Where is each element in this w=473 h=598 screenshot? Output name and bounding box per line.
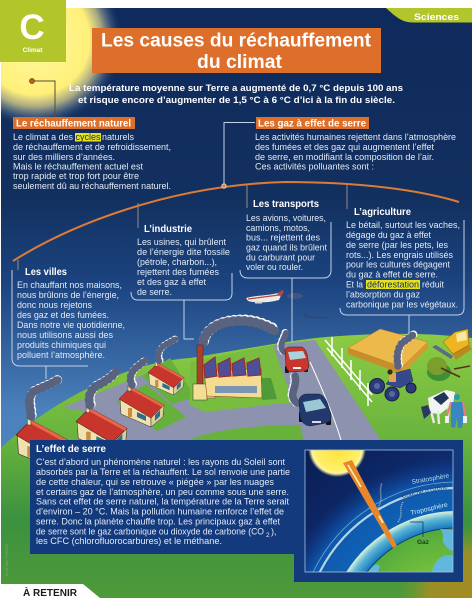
green hill landscape (1, 320, 472, 598)
panel: natural warming: de réchauffement et de refroidissement, (13, 142, 171, 152)
uprooted tree (427, 357, 470, 381)
panel: greenhouse gases: des fumées et des gaz qui augmentent l’effet (255, 142, 434, 152)
panel: agriculture: déforestation (367, 280, 419, 290)
house smoke (29, 338, 177, 416)
panel: cities: Dans notre vie quotidienne, (17, 320, 125, 330)
hay field (348, 329, 428, 374)
panel: industry: L’industrie (144, 224, 192, 235)
panel: cities: polluent l’atmosphère. (17, 350, 105, 360)
red car smoke (280, 332, 286, 352)
rising gas (378, 483, 403, 522)
letter tab: Climat (23, 47, 43, 54)
panel: cities: En chauffant nos maisons, (17, 280, 122, 290)
sun connector (30, 78, 55, 117)
tractor (370, 369, 416, 401)
panel: agriculture: rots...). Les engrais utilisés (346, 250, 453, 260)
factory (193, 320, 276, 400)
panel: greenhouse effect: d’environ – 20 °C. Mais la pollution humaine renforce l’effet de (36, 506, 284, 516)
section tab: Sciences: Sciences (414, 12, 459, 23)
panel: agriculture: L’agriculture (354, 207, 411, 218)
panel: industry: rejettent des fumées (137, 267, 220, 277)
panel: greenhouse effect: serre. Donc la planète chauffe trop. Les principaux gaz à effet (36, 516, 280, 526)
atmosphere diagram: Troposphère (410, 501, 449, 517)
panel: transport: Les avions, voitures, (246, 213, 326, 223)
panel: natural warming (13, 117, 171, 191)
panel: transport: gaz quand ils brûlent (246, 242, 327, 252)
panel: cities: nous utilisons aussi des (17, 330, 113, 340)
panel: greenhouse effect: absorbés par la Terre et la réchauffent. Le sol renvoie une partie (36, 467, 290, 477)
panel: agriculture: carbonique par les végétaux. (346, 300, 458, 310)
panel: natural warming: naturels (102, 132, 134, 142)
panel: transport: camions, motos, (246, 223, 310, 233)
sun ray (343, 460, 397, 548)
panel: cities: Les villes (25, 267, 67, 278)
tiny credit: PLAY BAC PRESSE (5, 543, 9, 576)
title: du climat (197, 51, 282, 73)
letter tab (0, 0, 66, 62)
intro text (69, 83, 403, 106)
panel: greenhouse effect: C’est d’abord un phénomène naturel : les rayons du Soleil sont (36, 457, 285, 467)
panel: cities: produits chimiques qui (17, 340, 106, 350)
fence (325, 337, 372, 406)
panel: greenhouse effect: ), (271, 526, 276, 536)
blue car smoke (292, 376, 297, 403)
section tab: Sciences (386, 8, 472, 23)
panel: agriculture: réduit (422, 280, 444, 290)
house 4 (148, 361, 184, 395)
panel: agriculture (340, 207, 464, 333)
house 2 (76, 406, 127, 453)
panel: agriculture: Et la (346, 280, 363, 290)
panel: cities: des gaz et des fumées. (17, 310, 109, 320)
house 3 (119, 385, 164, 427)
panel: natural warming: sur des milliers d’années. (13, 152, 115, 162)
atmosphere diagram: Couche d’ozone (401, 484, 449, 500)
panel: cities (12, 267, 125, 379)
panel: transport: Les transports (253, 199, 319, 210)
atmosphere diagram (304, 450, 454, 572)
panel: greenhouse gases: Les activités humaines rejettent dans l’atmosphère (255, 132, 456, 142)
labels: Stratosphère (411, 472, 450, 486)
panel: industry (131, 224, 232, 339)
house 1 (16, 418, 72, 470)
cow (421, 390, 455, 424)
panel: natural warming: Le réchauffement naturel (16, 118, 131, 130)
panel: industry: Les usines, qui brûlent (137, 237, 226, 247)
panel: greenhouse effect: L’effet de serre (36, 444, 106, 455)
panel: greenhouse gases (224, 117, 456, 186)
panel: greenhouse effect: Sans cet effet de serre naturel, la température de la Terre serait (36, 496, 289, 506)
panel: industry: de l’énergie dite fossile (137, 247, 230, 257)
panel: agriculture: de serre (par les pets, les (346, 240, 448, 250)
panel: natural warming: Le climat a des (13, 132, 73, 142)
panel: greenhouse effect: et certains gaz de l’atmosphère, un peu comme sous une serre. (36, 487, 289, 497)
blue car (299, 394, 331, 426)
atmosphere diagram: Gaz (417, 539, 430, 546)
orange arc (13, 182, 459, 270)
letter tab: C (19, 8, 45, 47)
tractor smoke (397, 334, 414, 366)
panel: agriculture: pour les cultures dégagent (346, 260, 450, 270)
panel: greenhouse gases: de serre, en modifiant la composition de l’air. (255, 152, 434, 162)
intro text: La température moyenne sur Terre a augmenté de 0,7 °C depuis 100 ans (69, 83, 403, 94)
panel: greenhouse effect: de serre sont le gaz carbonique ou dioxyde de carbone (CO (36, 526, 264, 536)
panel: natural warming: cycles (76, 132, 101, 142)
panel: cities: nous brûlons de l’énergie, (17, 290, 119, 300)
panel: natural warming: Mais le réchauffement actuel est (13, 162, 143, 172)
red car (285, 347, 309, 373)
plane shadow (302, 312, 327, 319)
title: Les causes du réchauffement (101, 30, 371, 52)
panel: natural warming: trop rapide et trop fort pour être (13, 171, 139, 181)
panel: cities: donc nous rejetons (17, 300, 92, 310)
footer tab: à retenir (0, 584, 100, 598)
panel: transport: du carburant pour (246, 252, 315, 262)
panel: greenhouse effect: de cette chaleur, qui se retrouve « piégée » par les nuages (36, 477, 274, 487)
panel: greenhouse gases: Ces activités polluantes sont : (255, 162, 374, 172)
panel: agriculture: dégage du gaz à effet (346, 230, 431, 240)
sun glow (1, 8, 131, 133)
title (92, 28, 381, 73)
roads (62, 340, 382, 442)
panel: greenhouse effect: 2 (266, 532, 270, 539)
intro text: et risque encore d’augmenter de 1,5 °C à 6 °C d’ici à la fin du siècle. (78, 95, 395, 106)
panel: industry: et des gaz à effet (137, 277, 206, 287)
panel: greenhouse effect (30, 440, 463, 582)
bulldozer (432, 329, 472, 360)
panel: greenhouse effect: les CFC (chlorofluorocarbures) et le méthane. (36, 536, 222, 546)
plane (246, 290, 303, 304)
panel: industry: de serre. (137, 287, 172, 297)
panel: natural warming: seulement dû au réchauffement naturel. (13, 181, 171, 191)
panel: agriculture: du gaz à effet de serre. (346, 270, 438, 280)
panel: transport (240, 199, 331, 342)
panel: transport: bus... rejettent des (246, 232, 320, 242)
panel: industry: (pétrole, charbon...), (137, 257, 217, 267)
panel: agriculture: l’absorption du gaz (346, 290, 420, 300)
panel: greenhouse gases: Les gaz à effet de serre (258, 118, 366, 130)
farmer (445, 394, 467, 428)
panel: agriculture: Le bétail, surtout les vaches, (346, 220, 460, 230)
panel: transport: voler ou rouler. (246, 262, 303, 272)
